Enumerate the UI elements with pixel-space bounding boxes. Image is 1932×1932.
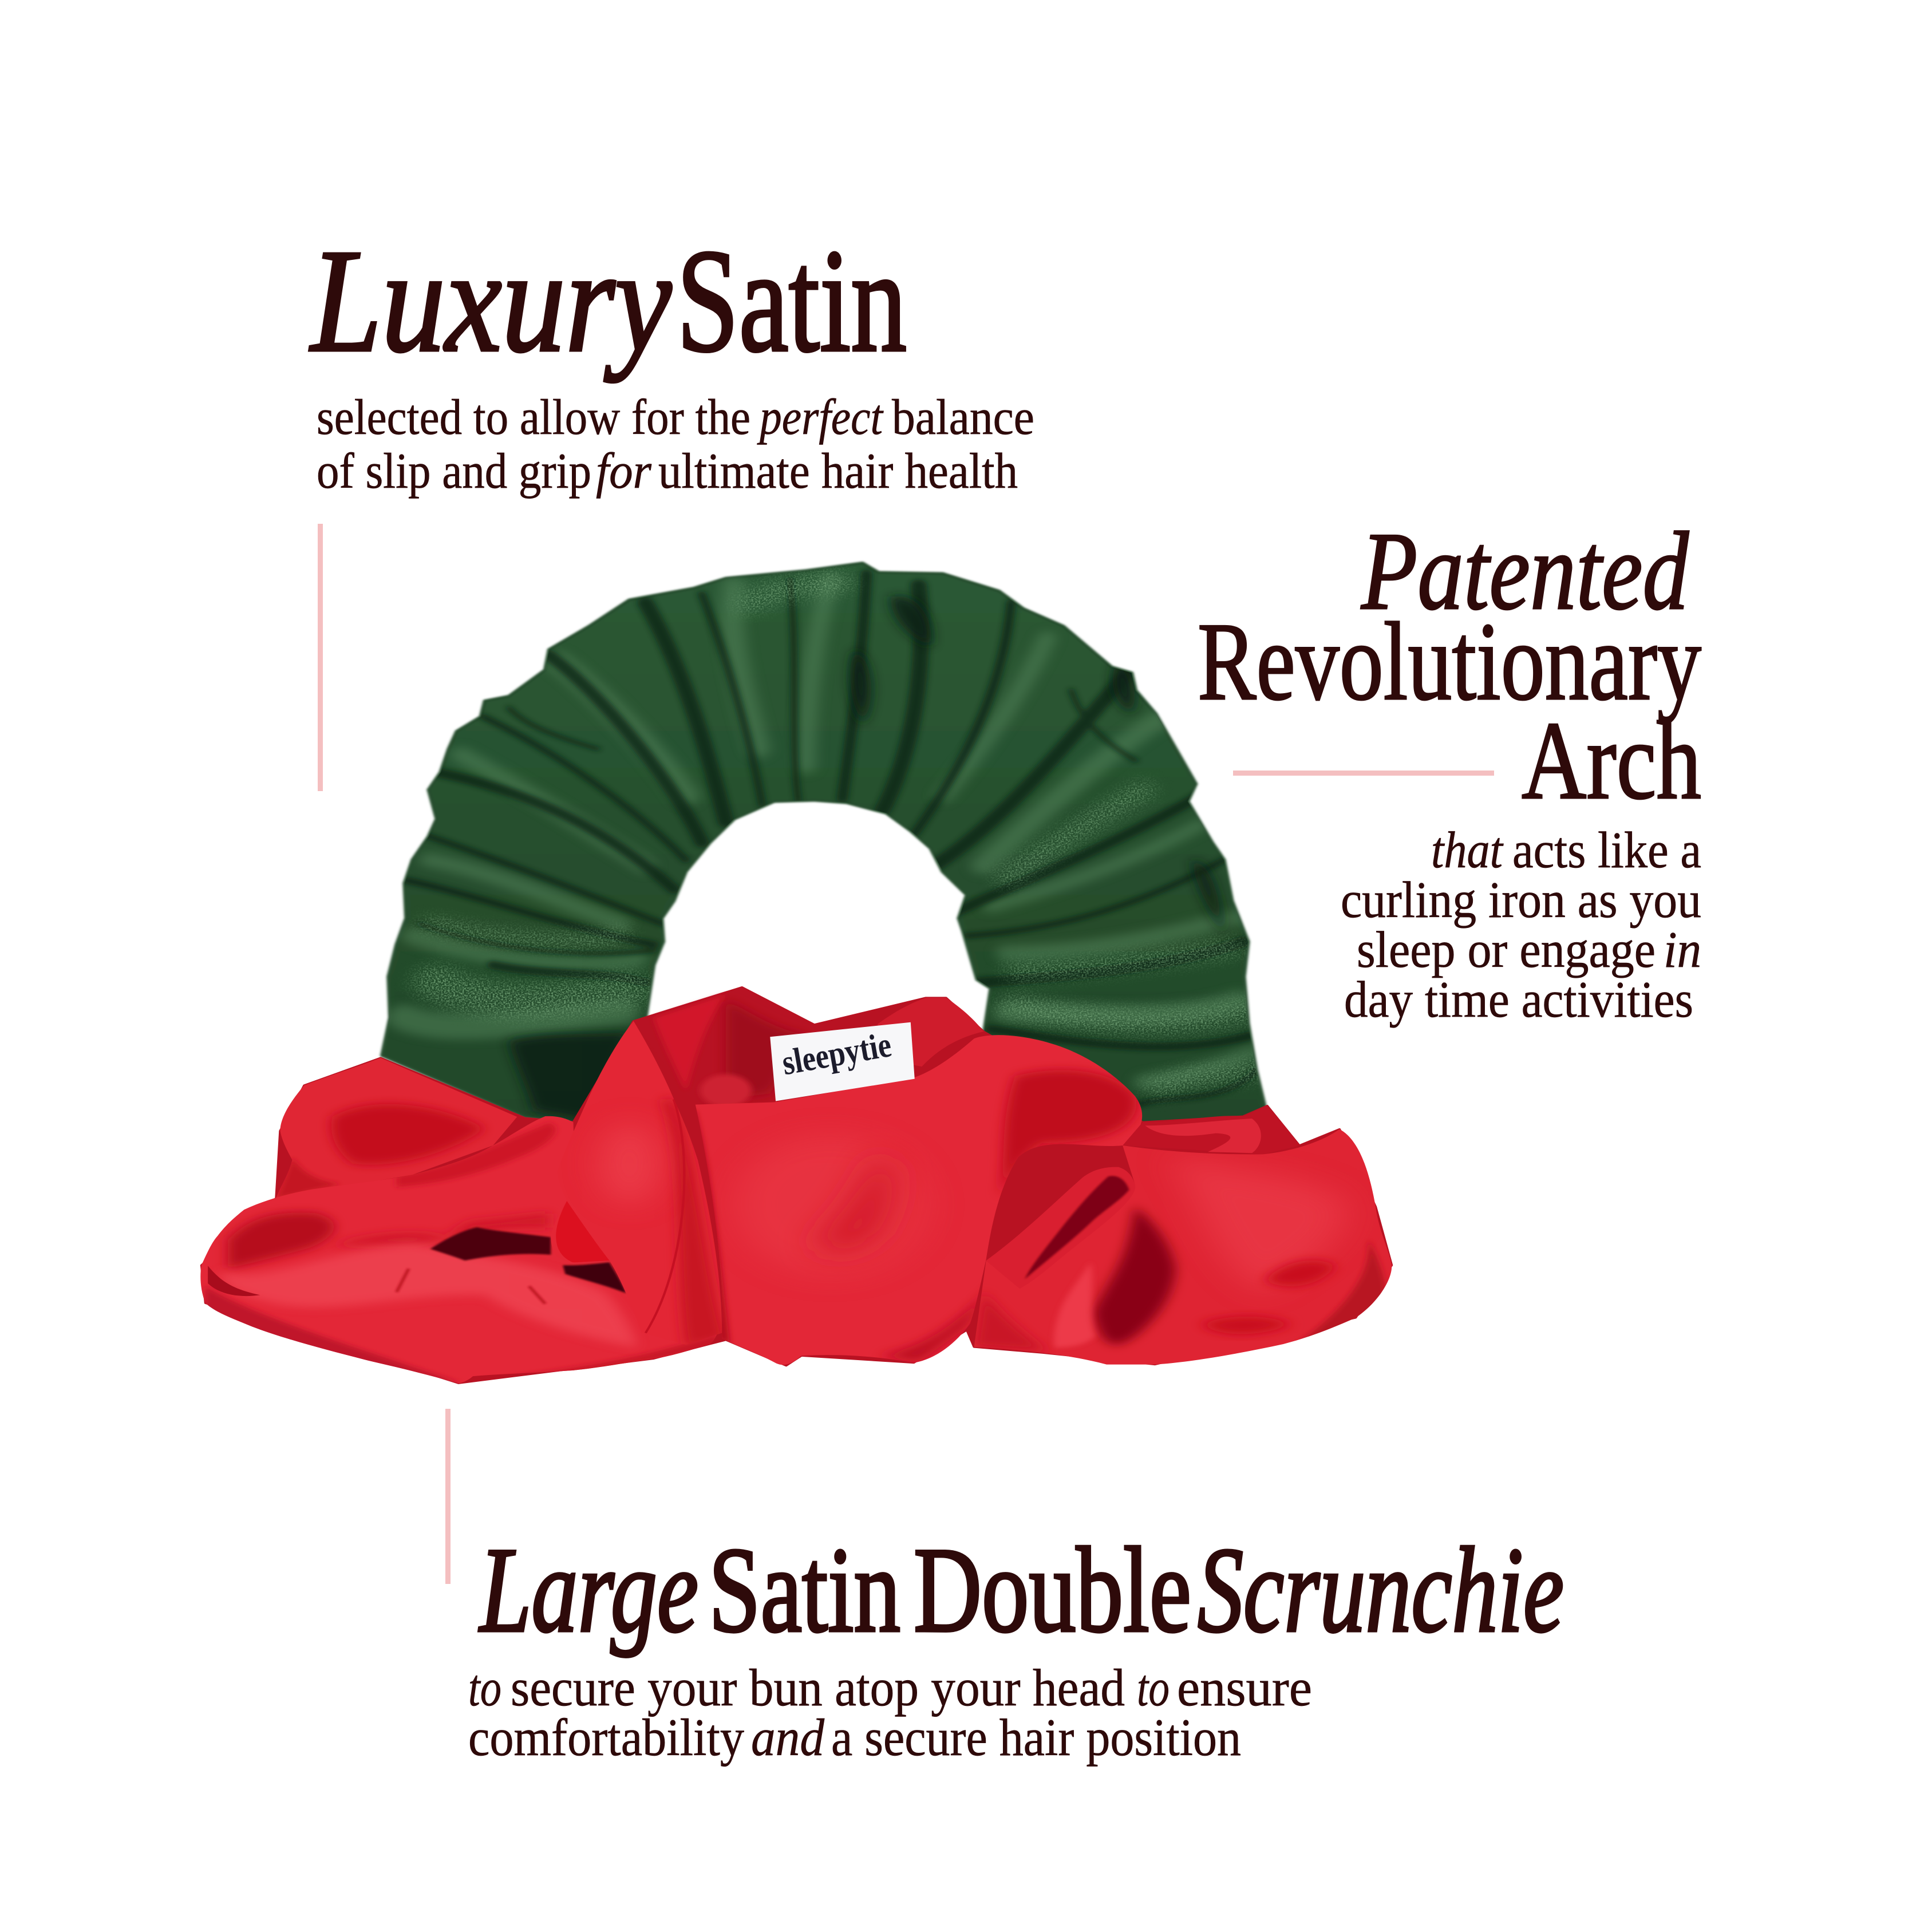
left centre petal <box>551 1021 726 1348</box>
left lower lobe <box>200 1116 722 1383</box>
body: large satin double scrunchie: a secure hair position <box>831 1708 1241 1767</box>
product photo: sleepytie arch with scrunchie <box>200 563 1392 1383</box>
body: large satin double scrunchie: to <box>1137 1658 1170 1717</box>
dark gap in left fold <box>430 1227 551 1261</box>
dark gap by petal <box>563 1262 626 1293</box>
heading: luxury satin: Satin <box>677 219 907 382</box>
left back lobe <box>276 1058 517 1199</box>
divider: arch horizontal <box>1233 771 1494 776</box>
text block: patented arch <box>1198 509 1701 1028</box>
heading: patented revolutionary arch: Revolutionary <box>1198 600 1701 724</box>
centre body <box>690 1035 1142 1365</box>
body: patented arch: day time activities <box>1344 971 1693 1028</box>
body: luxury satin: perfect <box>757 390 884 445</box>
scrunchie silhouette base <box>202 987 1392 1383</box>
heading: patented revolutionary arch: Patented <box>1360 509 1689 633</box>
body: large satin double scrunchie: to <box>468 1658 501 1717</box>
body: large satin double scrunchie: comfortability <box>468 1708 744 1767</box>
back right loop highlight <box>1145 1119 1261 1153</box>
body: luxury satin: balance <box>892 390 1034 445</box>
heading: large satin double scrunchie: Scrunchie <box>1198 1523 1564 1658</box>
body: patented arch: acts like a <box>1512 822 1701 879</box>
body: luxury satin: ultimate hair health <box>658 444 1018 499</box>
body: large satin double scrunchie: secure your bun atop your head <box>511 1658 1125 1717</box>
folded ribbon <box>986 1167 1135 1289</box>
woven brand tag: sleepytie <box>779 1025 894 1082</box>
infographic canvas <box>200 251 1702 1767</box>
body: large satin double scrunchie <box>468 1658 1312 1767</box>
heading: luxury satin <box>309 219 907 382</box>
heading: patented revolutionary arch <box>1198 509 1701 823</box>
green satin arch <box>382 563 1267 1125</box>
heading: luxury satin: Luxury <box>309 219 673 382</box>
heading: large satin double scrunchie: Large <box>479 1523 698 1658</box>
body: patented arch: curling iron as you <box>1341 872 1701 929</box>
back fold behind tag, left <box>634 987 814 1107</box>
body: luxury satin: selected to allow for the <box>317 390 750 445</box>
body: patented arch: sleep or engage <box>1357 922 1656 978</box>
divider: luxury satin vertical <box>318 524 323 791</box>
body: patented arch: in <box>1664 922 1701 978</box>
text block: luxury satin <box>309 219 1034 499</box>
back fold shading <box>654 994 806 1107</box>
body: patented arch <box>1341 822 1701 1028</box>
right lobe <box>974 1129 1392 1365</box>
body: large satin double scrunchie: and <box>751 1708 825 1767</box>
body: patented arch: that <box>1431 822 1504 879</box>
back right fold <box>1123 1106 1299 1154</box>
body: large satin double scrunchie: ensure <box>1177 1658 1312 1717</box>
red scrunchie <box>200 987 1392 1383</box>
back fold behind tag, right <box>878 998 983 1066</box>
divider: scrunchie vertical <box>445 1409 451 1584</box>
body: luxury satin: of slip and grip <box>317 444 591 499</box>
heading: large satin double scrunchie: Satin <box>709 1523 900 1658</box>
body: luxury satin <box>317 390 1034 499</box>
heading: patented revolutionary arch: Arch <box>1522 699 1701 823</box>
heading: large satin double scrunchie: Double <box>914 1523 1191 1658</box>
body: luxury satin: for <box>596 444 652 499</box>
heading: large satin double scrunchie <box>479 1523 1564 1658</box>
text block: large satin double scrunchie <box>468 1523 1564 1767</box>
